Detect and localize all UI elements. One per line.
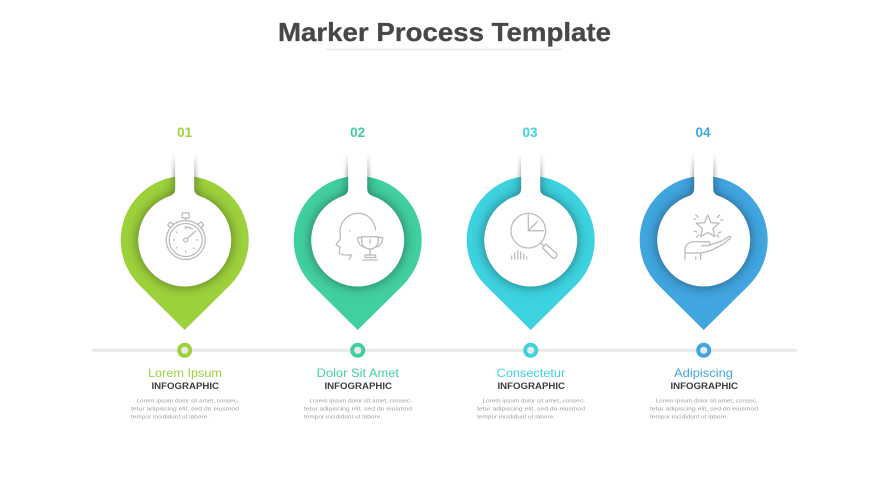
number 01: 01 — [177, 125, 193, 140]
body text 2: tempor incididunt ut labore. — [304, 414, 382, 420]
body text 4: tetur adipiscing elit, sed do eiusmod — [650, 406, 758, 412]
body text 1 — [131, 398, 239, 420]
connector dot 4 — [696, 343, 711, 358]
number 04: 04 — [695, 125, 711, 140]
icon: stopwatch — [166, 213, 205, 260]
body text 3: tempor incididunt ut labore. — [477, 414, 555, 420]
body text 1: Lorem ipsum dolor sit amet, consec- — [136, 398, 239, 404]
body text 4 — [650, 398, 758, 420]
icon: pie chart magnifier — [511, 213, 557, 259]
subheading 1: INFOGRAPHIC — [152, 381, 219, 392]
body text 3: Lorem ipsum dolor sit amet, consec- — [482, 398, 585, 404]
body text 3 — [477, 398, 585, 420]
title underline — [325, 48, 563, 50]
marker 2 — [294, 150, 422, 330]
body text 4: Lorem ipsum dolor sit amet, consec- — [656, 398, 758, 404]
number 03: 03 — [522, 125, 538, 140]
body text 2 — [304, 398, 412, 420]
connector dot 3 — [523, 343, 538, 358]
title: Marker Process Template — [278, 17, 611, 47]
body text 2: tetur adipiscing elit, sed do eiusmod — [304, 406, 412, 412]
body text 4: tempor incididunt ut labore. — [650, 414, 728, 420]
body text 1: tempor incididunt ut labore. — [131, 414, 209, 420]
step 2 — [294, 125, 422, 420]
step 3 — [467, 125, 595, 420]
number 02: 02 — [350, 125, 365, 140]
connector dot 2 — [350, 343, 365, 358]
connector dot 1 — [177, 343, 192, 358]
icon: hand holding star — [685, 215, 731, 259]
step 4 — [640, 125, 768, 420]
timeline — [92, 349, 797, 352]
body text 1: tetur adipiscing elit, sed do eiusmod — [131, 406, 239, 412]
subheading 3: INFOGRAPHIC — [498, 381, 565, 392]
heading 4: Adipiscing — [674, 366, 733, 380]
heading 3: Consectetur — [497, 366, 565, 380]
subheading 4: INFOGRAPHIC — [670, 381, 738, 392]
marker 4 — [640, 150, 768, 330]
heading 2: Dolor Sit Amet — [317, 366, 400, 380]
heading 1: Lorem Ipsum — [148, 366, 222, 380]
step 1 — [121, 125, 249, 420]
marker 1 — [121, 150, 249, 330]
icon: head and trophy — [336, 213, 383, 260]
subheading 2: INFOGRAPHIC — [324, 381, 392, 392]
body text 3: tetur adipiscing elit, sed do eiusmod — [477, 406, 585, 412]
body text 2: Lorem ipsum dolor sit amet, consec- — [310, 398, 412, 404]
marker 3 — [467, 150, 595, 330]
